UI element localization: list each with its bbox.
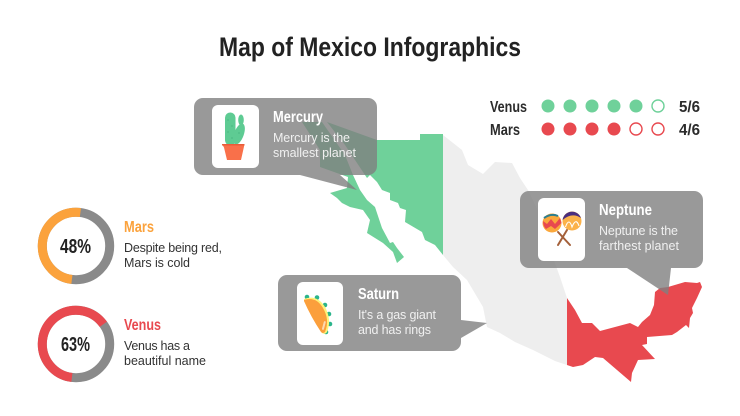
donut: Venus: 63%	[61, 334, 90, 356]
donut: Mars: 48%	[60, 236, 91, 258]
callout: Saturn: and has rings	[358, 323, 431, 337]
icon: maracas	[542, 212, 582, 245]
rating row: Venus	[490, 99, 700, 116]
callout: Neptune: farthest planet	[599, 239, 680, 253]
icon: cactus	[222, 112, 247, 160]
callout: Neptune	[520, 191, 703, 295]
callout: Mercury	[194, 98, 377, 190]
title: Map of Mexico Infographics	[219, 32, 521, 62]
callout: Mercury: Mercury is the	[273, 131, 350, 145]
rating row: Venus: 5/6	[679, 99, 700, 116]
donut: Venus	[38, 306, 114, 382]
callout: Neptune: Neptune	[599, 202, 652, 219]
map region: northwest green	[302, 122, 443, 263]
callout: Neptune: Neptune is the	[599, 224, 678, 238]
text: Mars: Mars	[124, 219, 154, 236]
callout: Saturn: It's a gas giant	[358, 308, 437, 322]
icon: taco	[304, 295, 332, 334]
rating row: Mars: 4/6	[679, 122, 700, 139]
rating row: Mars	[490, 122, 700, 139]
text: Mars	[124, 219, 222, 270]
text: Venus: Venus	[124, 317, 161, 334]
text: Venus	[124, 317, 206, 368]
donut: Mars	[38, 208, 114, 284]
callout: Saturn	[278, 275, 487, 351]
rating row: Mars: Mars	[490, 122, 520, 139]
map region: central grey	[443, 135, 567, 365]
callout: Saturn: Saturn	[358, 286, 399, 303]
rating row: Venus: Venus	[490, 99, 527, 116]
map region: southeast red	[567, 282, 702, 382]
text: Venus: Venus has a	[124, 339, 190, 353]
rating legend	[490, 99, 700, 139]
callout: Mercury: Mercury	[273, 109, 323, 126]
text: Mars: Despite being red,	[124, 241, 222, 255]
callout: Mercury: smallest planet	[273, 146, 357, 160]
map of Mexico	[302, 122, 702, 382]
text: Venus: beautiful name	[124, 354, 206, 368]
text: Mars: Mars is cold	[124, 256, 190, 270]
